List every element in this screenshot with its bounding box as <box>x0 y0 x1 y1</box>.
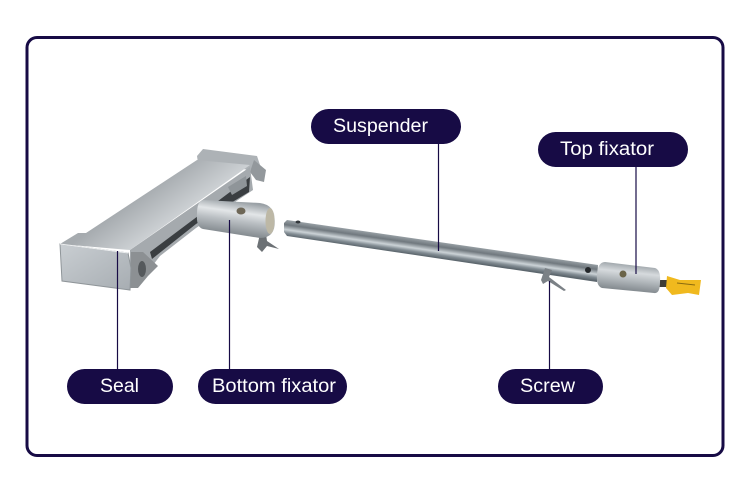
seal slot inner highlight <box>228 176 247 195</box>
screw <box>541 268 566 291</box>
bottom fixator cylinder <box>197 200 275 238</box>
label: Top fixator: Top fixator <box>560 139 655 160</box>
seal housing <box>60 149 266 290</box>
panel: rounded frame <box>27 38 723 456</box>
seal dark slot <box>150 177 250 259</box>
label: Bottom fixator: Bottom fixator <box>212 376 337 397</box>
leader line: suspender <box>438 142 440 251</box>
top fixator <box>597 262 701 295</box>
seal bracket bolt <box>138 261 146 277</box>
seal near bracket <box>130 252 158 288</box>
leader line: bottom fixator <box>228 220 230 372</box>
yellow plug <box>666 276 701 295</box>
label: Screw <box>498 369 603 404</box>
top fixator hole <box>620 270 626 278</box>
label: Seal <box>67 369 173 404</box>
leader line: top fixator <box>635 165 637 274</box>
label: Screw: Screw <box>520 376 575 397</box>
top fixator cylinder <box>597 262 660 293</box>
suspender tube <box>284 220 598 282</box>
bottom fixator end cap <box>266 208 274 234</box>
tube end hole <box>585 267 591 273</box>
plug slot <box>677 283 695 285</box>
label: Suspender: Suspender <box>333 116 429 137</box>
label: Seal: Seal <box>100 376 139 397</box>
leader line: screw <box>548 281 550 372</box>
seal front face <box>60 244 131 290</box>
top fixator stud <box>659 280 669 287</box>
bottom fixator screw hole <box>236 208 246 214</box>
seal far end cap <box>197 149 261 170</box>
seal far bracket <box>250 160 266 182</box>
seal face top highlight <box>60 244 128 253</box>
bottom fixator screw <box>257 234 279 252</box>
label: Suspender <box>311 109 461 144</box>
seal side rail <box>130 167 253 288</box>
label: Top fixator <box>538 132 688 167</box>
seal top surface <box>60 160 250 250</box>
leader line: seal <box>116 251 118 372</box>
tube top hole <box>296 220 300 224</box>
bottom fixator <box>197 200 279 252</box>
label: Bottom fixator <box>198 369 347 404</box>
